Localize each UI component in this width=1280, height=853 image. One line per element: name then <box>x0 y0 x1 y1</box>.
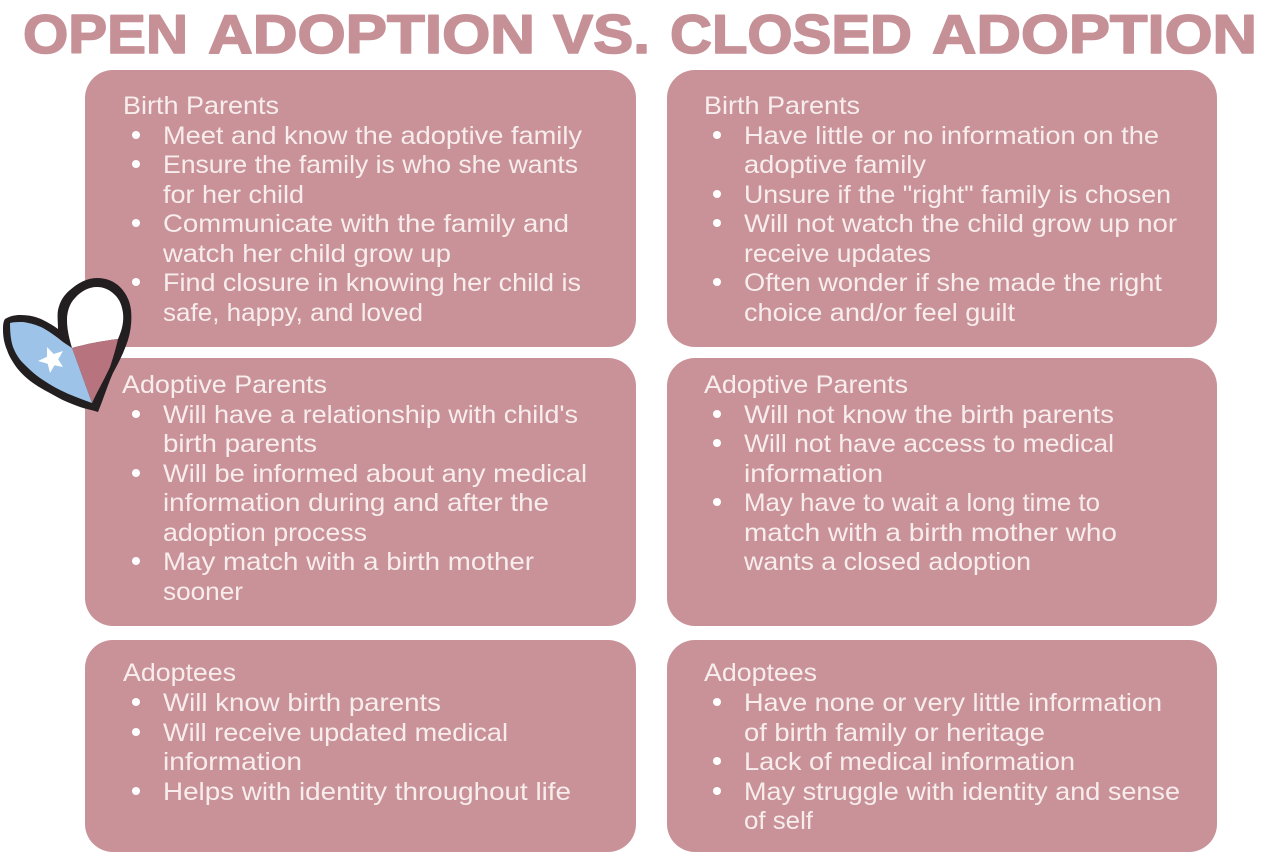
panel: open adoption, adoptive parents: information during and after the <box>163 489 549 517</box>
panel: closed adoption, adoptive parents: information <box>744 460 883 488</box>
panel: open adoption, birth parents: Find closure in knowing her child is <box>163 269 581 297</box>
panel: open adoption, adoptees: Will receive updated medical <box>163 719 508 747</box>
panel: closed adoption, birth parents <box>667 70 1217 347</box>
title: ADOPTION <box>208 3 535 65</box>
panel: open adoption, birth parents: Birth Parents <box>123 92 279 120</box>
panel: open adoption, birth parents: safe, happy, and loved <box>163 299 423 327</box>
panel: closed adoption, adoptive parents: Will not have access to medical <box>744 430 1114 458</box>
panel: closed adoption, adoptive parents: wants a closed adoption <box>743 548 1031 576</box>
panel: open adoption, birth parents: Meet and know the adoptive family <box>163 122 583 150</box>
title: VS. <box>553 3 650 65</box>
panel: open adoption, adoptive parents: Will have a relationship with child's <box>163 401 578 429</box>
panel: closed adoption, adoptive parents: May have to wait a long time to <box>744 489 1100 517</box>
panel: closed adoption, adoptive parents: Will not know the birth parents <box>744 401 1114 429</box>
panel: open adoption, adoptive parents: Adoptive Parents <box>122 371 327 399</box>
panel: open adoption, adoptive parents: birth parents <box>163 430 317 458</box>
panel: open adoption, adoptees: Will know birth parents <box>163 689 441 717</box>
panel: open adoption, birth parents <box>85 70 636 347</box>
panel: open adoption, adoptees: Adoptees <box>123 659 236 687</box>
title: CLOSED <box>670 3 912 65</box>
panel: open adoption, adoptive parents <box>85 358 636 626</box>
panel: closed adoption, adoptive parents: match with a birth mother who <box>744 519 1117 547</box>
panel: closed adoption, birth parents: choice and/or feel guilt <box>744 299 1015 327</box>
title: ADOPTION <box>932 3 1257 65</box>
panel: closed adoption, birth parents: Unsure if the "right" family is chosen <box>744 181 1171 209</box>
panel: closed adoption, adoptees: Lack of medical information <box>744 748 1075 776</box>
panel: closed adoption, adoptees: May struggle with identity and sense <box>744 778 1180 806</box>
panel: open adoption, birth parents: for her child <box>163 181 304 209</box>
panel: closed adoption, adoptive parents: Adoptive Parents <box>704 371 908 399</box>
panel: closed adoption, adoptees: of self <box>744 807 813 835</box>
panel: closed adoption, birth parents: receive updates <box>744 240 931 268</box>
panel: open adoption, adoptive parents: adoption process <box>163 519 367 547</box>
panel: closed adoption, birth parents: Birth Parents <box>704 92 860 120</box>
panel: closed adoption, birth parents: Often wonder if she made the right <box>744 269 1162 297</box>
panel: open adoption, birth parents: watch her child grow up <box>162 240 451 268</box>
panel: open adoption, adoptees: Helps with identity throughout life <box>163 778 571 806</box>
panel: open adoption, adoptive parents: May match with a birth mother <box>163 548 534 576</box>
panel: open adoption, birth parents: Ensure the family is who she wants <box>163 151 578 179</box>
panel: closed adoption, birth parents: adoptive family <box>744 151 927 179</box>
panel: closed adoption, adoptees: Adoptees <box>704 659 817 687</box>
panel: closed adoption, adoptees: Have none or very little information <box>744 689 1162 717</box>
panel: closed adoption, adoptees <box>667 640 1217 852</box>
panel: open adoption, adoptive parents: sooner <box>163 578 243 606</box>
panel: open adoption, adoptive parents: Will be informed about any medical <box>163 460 587 488</box>
panel: closed adoption, birth parents: Have little or no information on the <box>744 122 1159 150</box>
title: OPEN <box>23 3 188 65</box>
panel: open adoption, birth parents: Communicate with the family and <box>163 210 569 238</box>
panel: open adoption, adoptees <box>85 640 636 852</box>
icon: Texas flag heart <box>3 278 131 412</box>
panel: closed adoption, adoptive parents <box>667 358 1217 626</box>
panel: closed adoption, birth parents: Will not watch the child grow up nor <box>744 210 1177 238</box>
panel: closed adoption, adoptees: of birth family or heritage <box>744 719 1045 747</box>
panel: open adoption, adoptees: information <box>163 748 302 776</box>
